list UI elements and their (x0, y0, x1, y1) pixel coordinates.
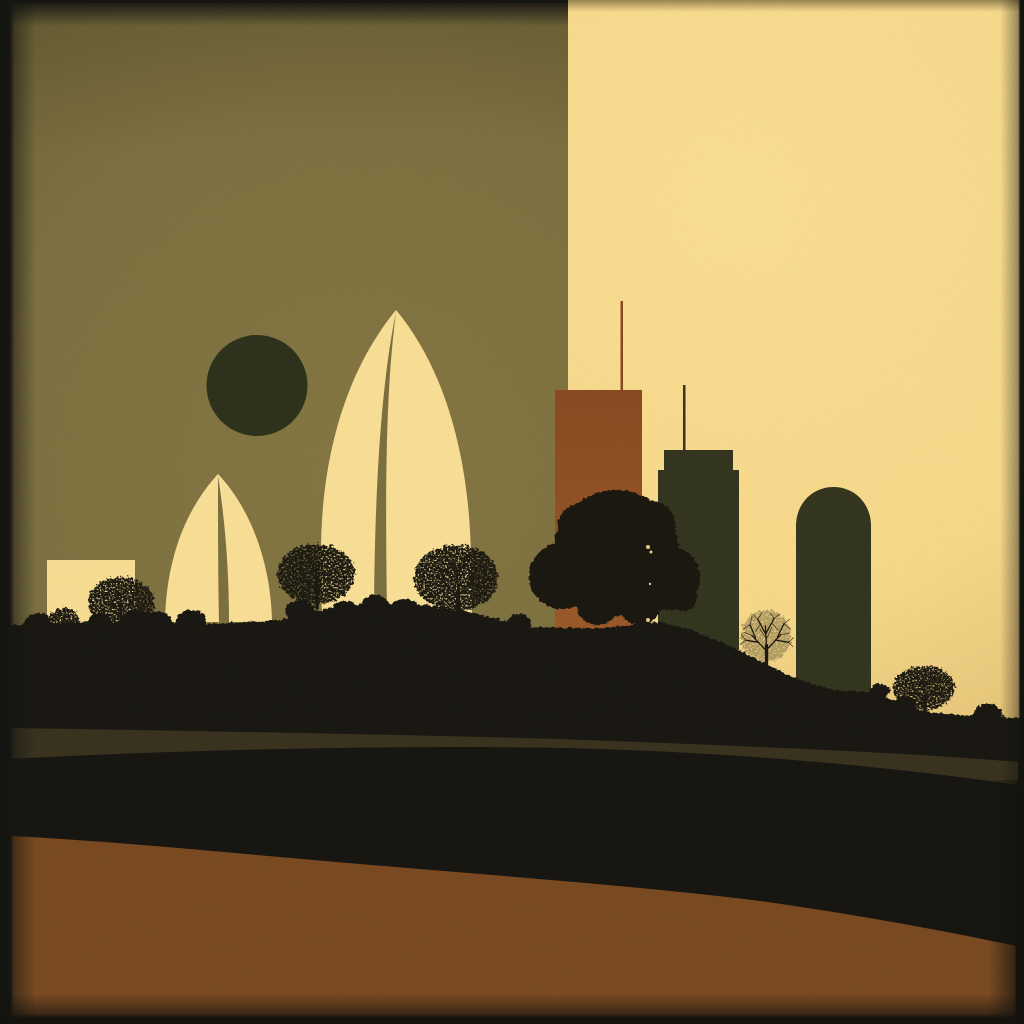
tree: right of large sail (414, 545, 498, 616)
dark disc (206, 335, 308, 436)
olive sky top shading (8, 3, 568, 153)
tree: bare near silo (740, 610, 793, 666)
large sail building (321, 310, 472, 620)
vignette: bottom edge (0, 994, 1024, 1024)
tree: by large sail (277, 544, 355, 608)
ochre foreground hill (11, 836, 1016, 1018)
rounded silo (796, 487, 871, 700)
tree: large round (529, 490, 700, 625)
tree: left over pale building (88, 577, 154, 627)
vignette: right edge of sky (1000, 0, 1024, 780)
vignette: top of olive panel (0, 0, 568, 26)
rust tower with antenna (555, 301, 642, 630)
dark hill (8, 595, 1024, 860)
tree: far right (893, 666, 955, 716)
pale rectangle building (47, 560, 135, 630)
panel: cream sky (568, 0, 1021, 740)
vignette: top of cream panel (568, 0, 1024, 12)
tree: small far left (49, 608, 79, 632)
vignette: left edge (0, 0, 36, 1024)
panel: olive sky (8, 3, 570, 743)
vignette: right edge of ground (988, 780, 1024, 1024)
green tower with antenna (658, 385, 739, 650)
small sail building (165, 474, 272, 622)
dark field (11, 747, 1018, 960)
pale road band (11, 728, 1018, 785)
